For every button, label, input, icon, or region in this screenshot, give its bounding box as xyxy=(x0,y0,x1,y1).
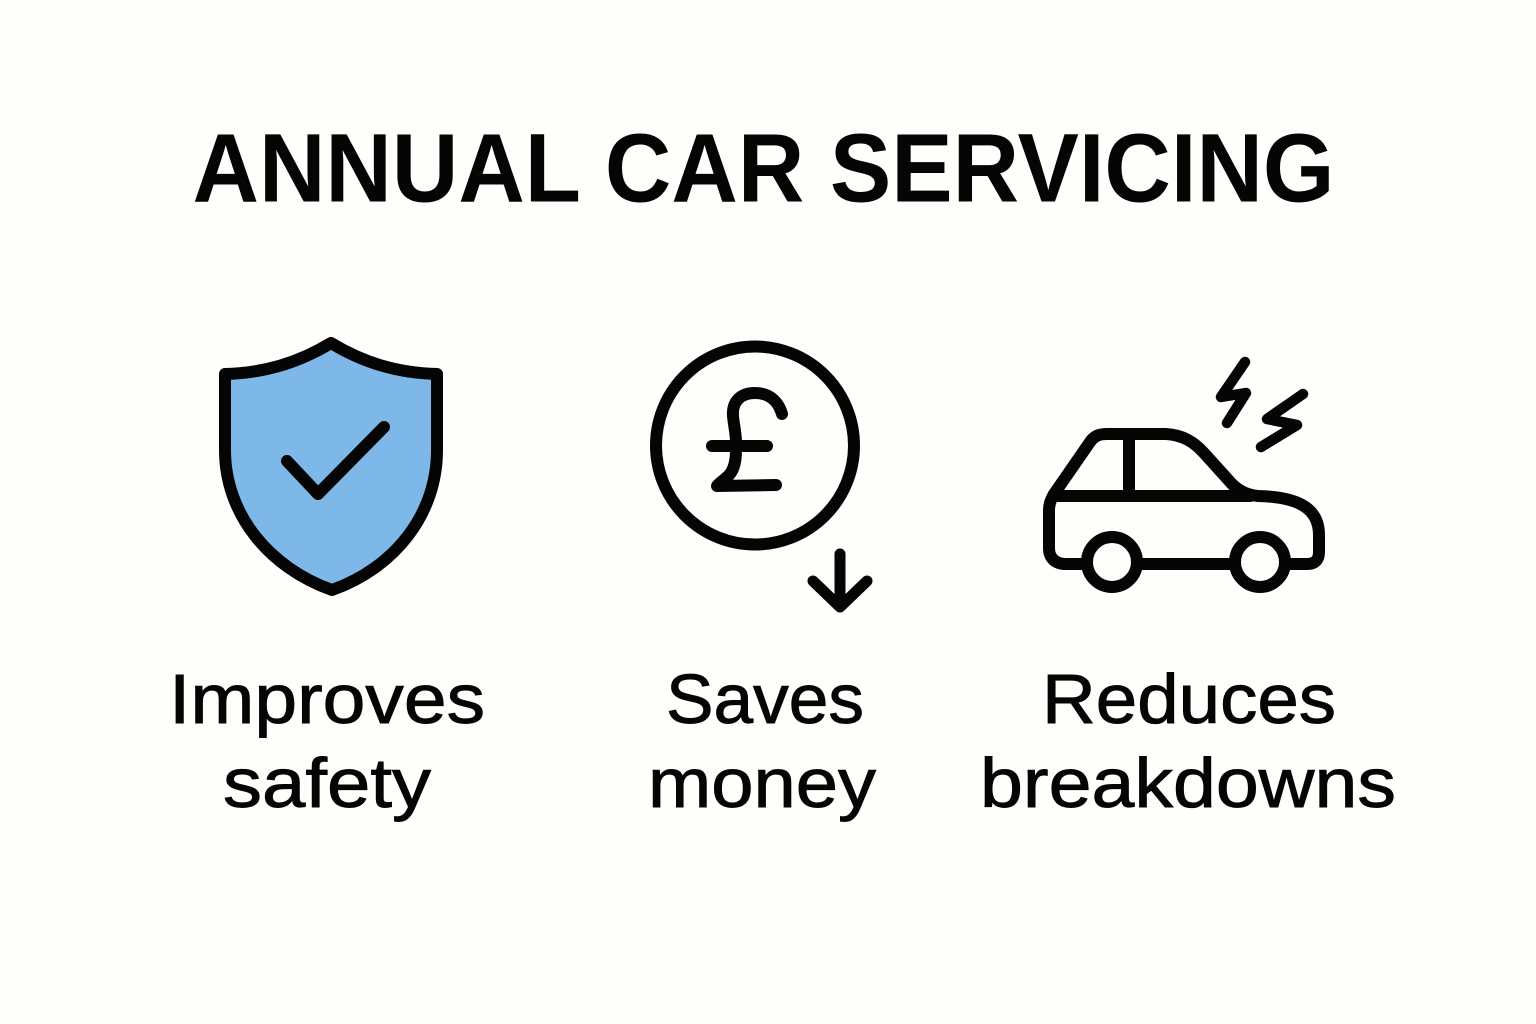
label: improves safety: Improves xyxy=(169,660,485,738)
label: reduces breakdowns: Reduces xyxy=(1042,660,1336,738)
label: improves safety: safety xyxy=(223,744,431,822)
label: saves money xyxy=(648,660,876,822)
label: saves money: Saves xyxy=(666,660,864,738)
title: ANNUAL CAR SERVICING xyxy=(192,114,1334,222)
label: reduces breakdowns xyxy=(980,660,1396,822)
label: saves money: money xyxy=(648,744,876,822)
label: improves safety xyxy=(169,660,485,822)
label: reduces breakdowns: breakdowns xyxy=(980,744,1396,822)
icon: sparks xyxy=(1221,362,1303,447)
icon: broken down car xyxy=(1049,362,1319,587)
icon: shield with check xyxy=(225,343,437,590)
icon: pound coin with down arrow xyxy=(656,346,867,607)
